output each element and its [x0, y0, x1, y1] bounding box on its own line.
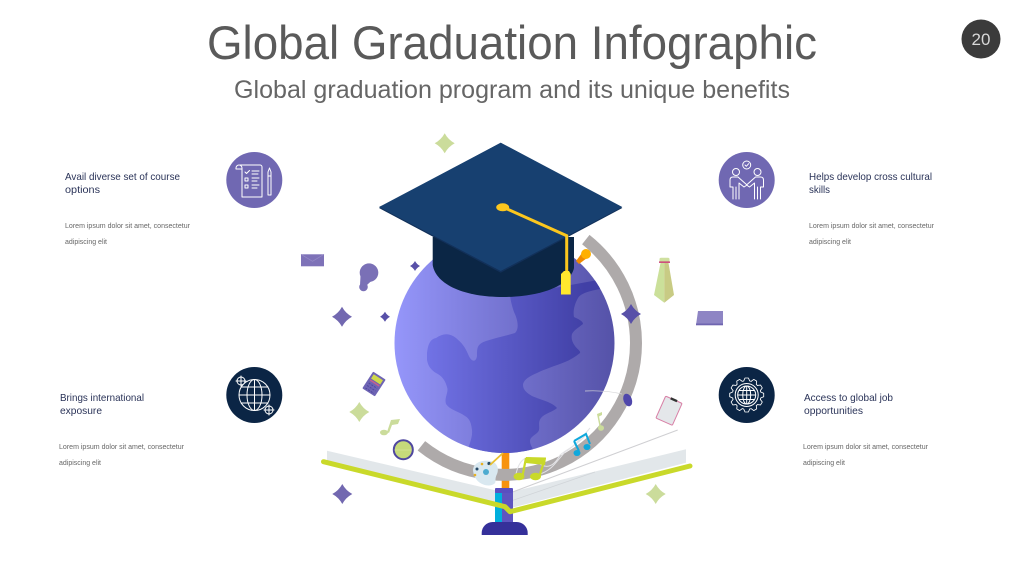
icon: closed book — [696, 311, 723, 325]
book pages — [327, 430, 686, 509]
icon: globe with markers — [226, 367, 282, 423]
text: international exposure description — [59, 444, 185, 467]
tassel — [496, 203, 571, 294]
page number badge: 20 — [972, 30, 990, 49]
icon: small green music note — [597, 412, 604, 431]
panel: course options — [65, 152, 282, 246]
page number badge — [962, 20, 1000, 58]
icon: green music note — [380, 419, 400, 435]
icon: computer mouse — [585, 391, 634, 408]
text: cross cultural description: adipiscing elit — [809, 239, 851, 246]
icon: handshake — [719, 152, 775, 208]
icon: gear with globe — [719, 367, 775, 423]
heading: course options: options — [65, 184, 100, 196]
music wires — [516, 428, 590, 474]
heading: cross cultural skills: Helps develop cross cultural — [809, 171, 932, 183]
panel: global job opportunities — [719, 367, 929, 467]
heading: global job opportunities: Access to global job — [804, 392, 893, 404]
icon: calculator — [362, 372, 386, 396]
icon: palette — [473, 453, 503, 485]
illustration: globe, cap and book — [301, 133, 723, 535]
icon: blue music notes — [574, 434, 590, 455]
orange ring connector — [576, 249, 591, 264]
heading: course options: Avail diverse set of course — [65, 171, 180, 183]
text: course options description: adipiscing elit — [65, 239, 107, 246]
text: global job description — [803, 444, 929, 467]
sparkle stars — [332, 133, 666, 504]
graduation cap base — [433, 237, 574, 297]
text: international exposure description: Lorem ipsum dolor sit amet, consectetur — [59, 444, 185, 451]
globe stand column — [502, 453, 509, 488]
panel: international exposure — [59, 367, 282, 467]
icon: yellow music notes — [514, 457, 546, 480]
text: cross cultural description — [809, 223, 935, 246]
text: global job description: Lorem ipsum dolor sit amet, consectetur — [803, 444, 929, 451]
stand collar — [495, 488, 513, 494]
stand stem — [495, 493, 513, 523]
icon: checklist and pencil — [226, 152, 282, 208]
icon: coin — [394, 440, 413, 459]
heading: global job opportunities — [804, 392, 893, 417]
subtitle: Global graduation program and its unique benefits — [234, 76, 790, 104]
heading: global job opportunities: opportunities — [804, 405, 863, 417]
heading: cross cultural skills — [809, 171, 932, 196]
heading: international exposure — [60, 392, 144, 417]
heading: international exposure: Brings international — [60, 392, 144, 404]
icon: envelope — [301, 254, 324, 266]
icon: light bulb — [359, 263, 378, 291]
text: course options description: Lorem ipsum dolor sit amet, consectetur — [65, 223, 191, 230]
text: global job description: adipiscing elit — [803, 460, 845, 467]
graduation cap board — [379, 143, 622, 273]
panel: cross cultural skills — [719, 152, 935, 246]
icon: necktie — [654, 258, 674, 303]
globe — [394, 258, 614, 453]
text: cross cultural description: Lorem ipsum dolor sit amet, consectetur — [809, 223, 935, 230]
globe ring — [421, 240, 636, 475]
heading: course options — [65, 171, 180, 196]
title: Global Graduation Infographic — [207, 16, 817, 69]
text: course options description — [65, 223, 191, 246]
book cover — [324, 462, 690, 512]
text: international exposure description: adipiscing elit — [59, 460, 101, 467]
heading: cross cultural skills: skills — [809, 184, 830, 196]
heading: international exposure: exposure — [60, 405, 102, 417]
stand base — [482, 522, 528, 535]
icon: clipboard — [656, 395, 683, 425]
